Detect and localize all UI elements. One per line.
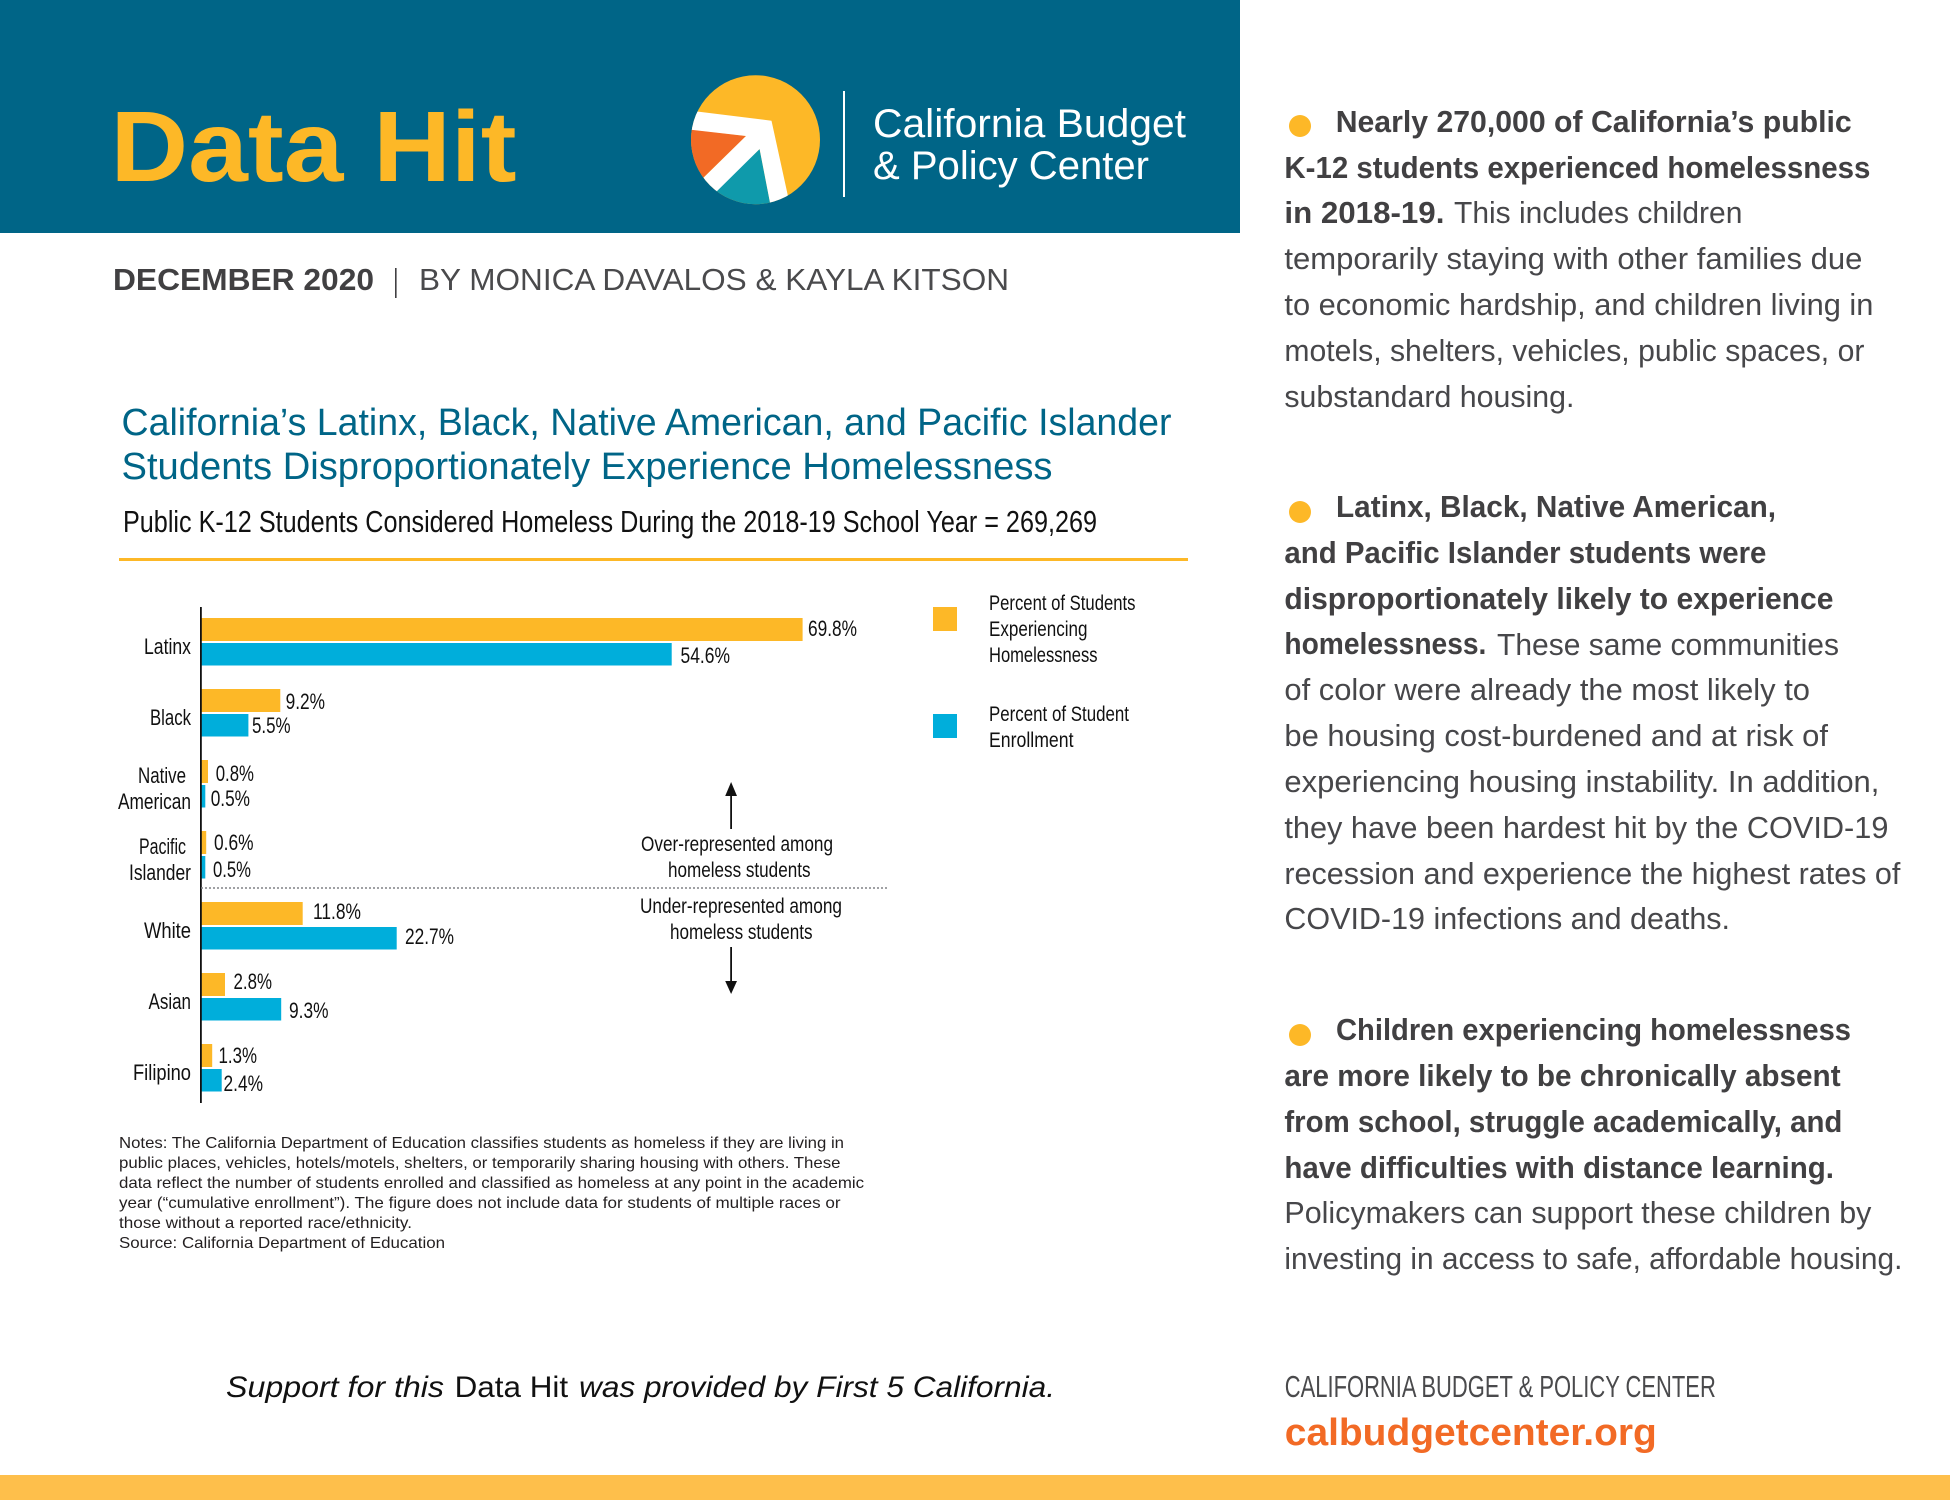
- annotation: under-represented: homeless students: [670, 921, 812, 944]
- value labels: 0.5%: [211, 786, 250, 811]
- organisation name: CALIFORNIA BUDGET & POLICY CENTER: [1285, 1369, 1716, 1404]
- header banner: [0, 0, 1240, 233]
- logo wordmark: California Budget: [873, 102, 1186, 146]
- date and byline: DECEMBER 2020: [113, 262, 374, 297]
- value labels: 9.2%: [286, 689, 325, 714]
- annotation: under-represented: Under-represented among: [640, 895, 842, 918]
- legend item: enrollment: Percent of Student: [989, 703, 1129, 726]
- value labels: 69.8%: [808, 616, 857, 641]
- value labels: 11.8%: [313, 899, 361, 924]
- category labels: Latinx: [144, 634, 191, 659]
- value labels: 1.3%: [218, 1043, 257, 1068]
- notes and source: Notes: The California Department of Education classifies students as homeless if they are living in: [119, 1135, 844, 1152]
- category labels: Asian: [148, 989, 191, 1014]
- text block: homelessness count: temporarily staying with other families due: [1284, 241, 1862, 276]
- text block: effects on children: Policymakers can support these children by: [1284, 1195, 1872, 1230]
- arrow: down: [725, 947, 737, 994]
- notes and source: data reflect the number of students enrolled and classified as homeless at any point in the academic: [119, 1175, 864, 1192]
- category labels: Filipino: [133, 1060, 191, 1085]
- category labels: Islander: [129, 860, 191, 885]
- bullet: [1289, 1024, 1311, 1046]
- legend: [933, 592, 1136, 752]
- text block: disproportionate impact: and Pacific Islander students were: [1284, 535, 1766, 570]
- value labels: [211, 616, 857, 1096]
- text block: effects on children: are more likely to be chronically absent: [1284, 1058, 1841, 1093]
- logo divider: [843, 91, 845, 197]
- legend item: homelessness: [933, 592, 1136, 667]
- bars: percent of students experiencing homelessness: [201, 618, 803, 1067]
- bars: percent of student enrollment: [201, 643, 672, 1092]
- chart heading: California’s Latinx, Black, Native American, and Pacific Islander: [122, 402, 1172, 444]
- vertical axis: [200, 607, 202, 1103]
- chart heading: [122, 402, 1172, 488]
- notes and source: those without a reported race/ethnicity.: [119, 1215, 412, 1232]
- text block: disproportionate impact: Latinx, Black, Native American,: [1336, 489, 1776, 524]
- annotation: over-represented: Over-represented among: [641, 833, 833, 856]
- text block: disproportionate impact: experiencing housing instability. In addition,: [1284, 764, 1879, 799]
- legend item: homelessness: Homelessness: [989, 644, 1098, 667]
- value labels: 0.6%: [214, 830, 254, 855]
- text block: disproportionate impact: be housing cost-burdened and at risk of: [1284, 718, 1828, 753]
- chart subheading: Public K-12 Students Considered Homeless During the 2018-19 School Year = 269,269: [123, 504, 1097, 539]
- date and byline: BY MONICA DAVALOS & KAYLA KITSON: [419, 262, 1009, 297]
- bullet: [1289, 501, 1311, 523]
- text block: homelessness count: to economic hardship, and children living in: [1284, 287, 1873, 322]
- category labels: [118, 634, 192, 1085]
- text block: disproportionate impact: of color were already the most likely to: [1284, 672, 1810, 707]
- text block: homelessness count: motels, shelters, vehicles, public spaces, or: [1284, 333, 1864, 368]
- notes and source: public places, vehicles, hotels/motels, shelters, or temporarily sharing housing with others. These: [119, 1155, 841, 1172]
- category labels: White: [144, 918, 191, 943]
- arrow: up: [725, 782, 737, 829]
- value labels: 22.7%: [405, 924, 454, 949]
- legend item: homelessness: Experiencing: [989, 618, 1088, 641]
- text block: disproportionate impact: disproportionately likely to experience: [1284, 581, 1833, 616]
- text block: disproportionate impact: These same communities: [1497, 627, 1839, 662]
- funding acknowledgement: Data Hit: [455, 1371, 569, 1404]
- category labels: American: [118, 789, 191, 814]
- notes and source: year (“cumulative enrollment”). The figure does not include data for students of multiple races or: [119, 1195, 841, 1212]
- text block: homelessness count: Nearly 270,000 of California’s public: [1336, 104, 1852, 139]
- legend item: homelessness: Percent of Students: [989, 592, 1136, 615]
- text block: homelessness count: [1284, 104, 1873, 414]
- text block: disproportionate impact: they have been hardest hit by the COVID-19: [1284, 810, 1888, 845]
- text block: homelessness count: in 2018-19.: [1284, 195, 1444, 230]
- text block: disproportionate impact: [1284, 489, 1901, 936]
- category labels: Black: [150, 705, 192, 730]
- funding acknowledgement: Support for this: [226, 1371, 444, 1404]
- text block: disproportionate impact: recession and experience the highest rates of: [1284, 856, 1901, 891]
- logo wordmark: & Policy Center: [873, 144, 1149, 188]
- text block: effects on children: investing in access to safe, affordable housing.: [1284, 1241, 1902, 1276]
- value labels: 5.5%: [252, 713, 291, 738]
- footer bar: [0, 1475, 1950, 1500]
- website url: calbudgetcenter.org: [1285, 1412, 1657, 1454]
- category labels: Native: [138, 763, 186, 788]
- annotation: under-represented: [640, 895, 842, 994]
- bullet: [1289, 115, 1311, 137]
- text block: homelessness count: This includes children: [1454, 195, 1742, 230]
- text block: effects on children: from school, struggle academically, and: [1284, 1104, 1842, 1139]
- notes and source: [119, 1135, 864, 1252]
- threshold dashed line: [201, 887, 889, 889]
- text block: disproportionate impact: COVID-19 infections and deaths.: [1284, 901, 1730, 936]
- value labels: 2.8%: [234, 969, 272, 994]
- funding acknowledgement: was provided by First 5 California.: [579, 1371, 1055, 1404]
- text block: effects on children: have difficulties with distance learning.: [1284, 1150, 1834, 1185]
- notes and source: Source: California Department of Education: [119, 1235, 445, 1252]
- text block: homelessness count: K-12 students experienced homelessness: [1284, 150, 1870, 185]
- annotation: over-represented: homeless students: [668, 859, 810, 882]
- value labels: 0.5%: [213, 857, 251, 882]
- text block: effects on children: Children experiencing homelessness: [1336, 1012, 1851, 1047]
- bar chart: [118, 607, 889, 1103]
- text block: homelessness count: substandard housing.: [1284, 379, 1574, 414]
- text block: disproportionate impact: homelessness.: [1284, 626, 1486, 661]
- title: Data Hit: Data Hit: [110, 91, 516, 203]
- chart heading: Students Disproportionately Experience Homelessness: [122, 446, 1052, 488]
- funding acknowledgement: [226, 1371, 1055, 1404]
- value labels: 0.8%: [216, 761, 254, 786]
- legend item: enrollment: [933, 703, 1129, 752]
- value labels: 54.6%: [680, 643, 730, 668]
- category labels: Pacific: [139, 834, 186, 859]
- legend item: enrollment: Enrollment: [989, 729, 1074, 752]
- value labels: 9.3%: [289, 998, 328, 1023]
- logo icon: circle with arrow: [691, 75, 820, 204]
- annotation: over-represented: [641, 782, 833, 882]
- date and byline: [113, 262, 1009, 298]
- value labels: 2.4%: [224, 1071, 263, 1096]
- logo wordmark: [873, 102, 1186, 188]
- text block: effects on children: [1284, 1012, 1902, 1276]
